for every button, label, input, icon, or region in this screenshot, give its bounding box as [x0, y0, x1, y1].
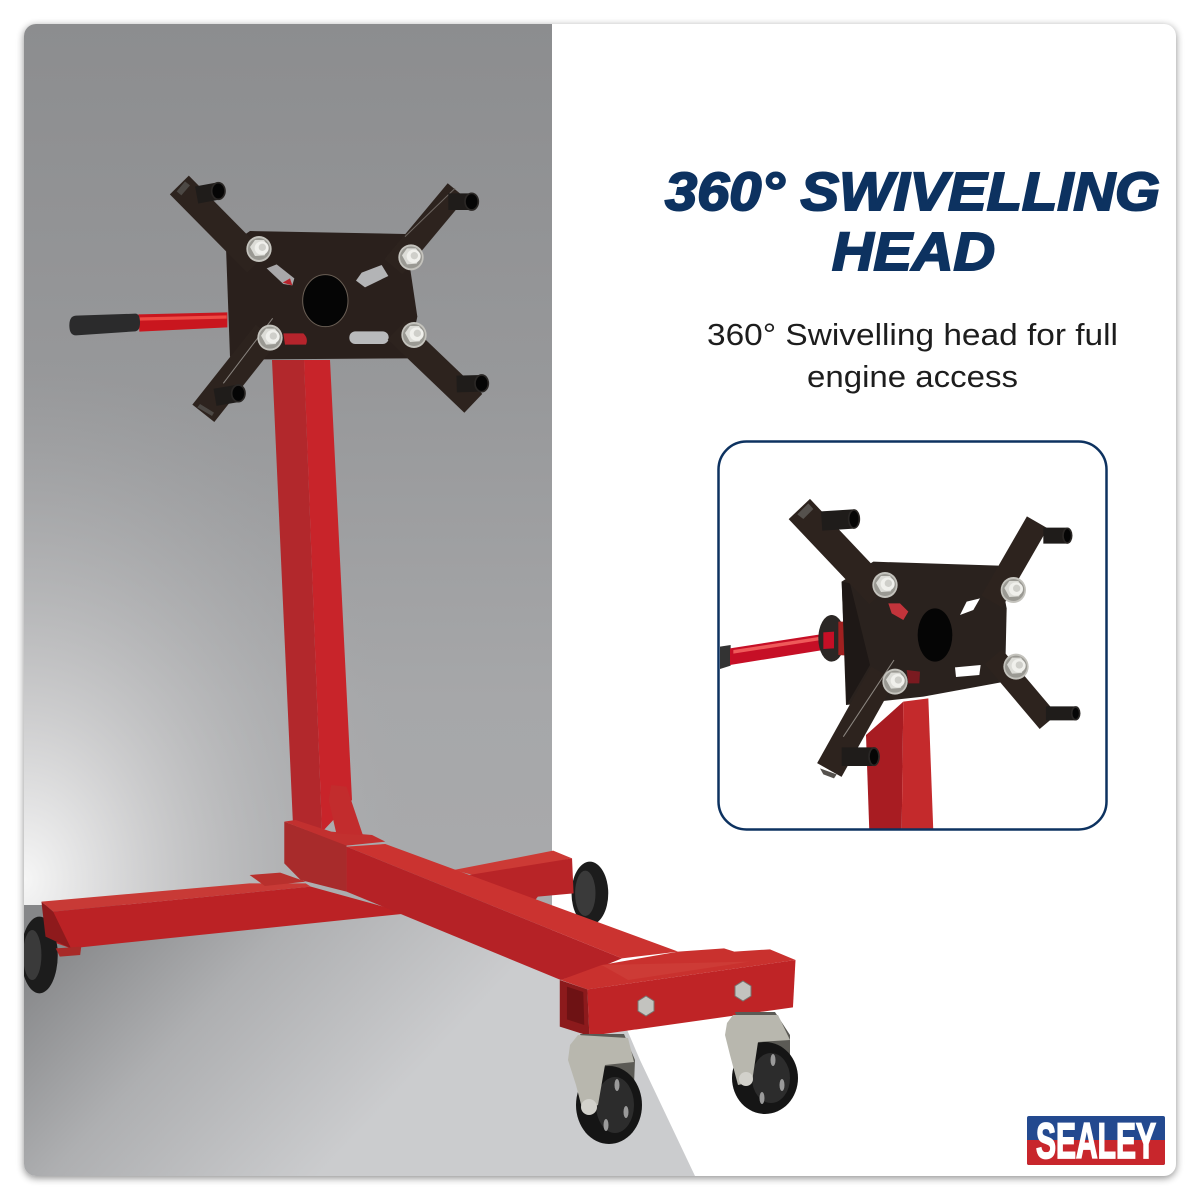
- handle: [69, 312, 227, 335]
- rear left wheel: [21, 917, 58, 993]
- inset bolts: [872, 572, 898, 598]
- stand column: [272, 360, 352, 832]
- rear right wheel: [572, 862, 608, 925]
- arms: [179, 185, 473, 413]
- inset arms: [799, 509, 1048, 770]
- front cross tube: [560, 948, 796, 1036]
- main beam: [347, 844, 678, 980]
- inset pegs: [822, 519, 1075, 757]
- title: 360° SWIVELLING: [665, 162, 1160, 222]
- head plate: [226, 231, 417, 359]
- inset handle: [720, 615, 847, 669]
- rotating head: [69, 181, 488, 416]
- inset plate: [842, 562, 1007, 705]
- product photo: engine stand: [21, 181, 798, 1144]
- inset photo: swivel head close-up: [720, 503, 1080, 832]
- caster: front left: [568, 1034, 642, 1144]
- description text: engine access: [807, 359, 1018, 394]
- centre sleeve: [284, 800, 386, 892]
- panel: detail inset: [718, 442, 1106, 832]
- slots: [267, 264, 294, 285]
- description text: [707, 317, 1118, 394]
- centre hole: [303, 275, 348, 327]
- panel: grey studio backdrop: [24, 24, 695, 1176]
- caster: front right: [725, 1012, 798, 1114]
- tube bolts: [638, 981, 751, 1016]
- cross beam: [41, 851, 574, 957]
- title: [664, 171, 1160, 271]
- base frame: [21, 785, 796, 1036]
- title: HEAD: [832, 222, 995, 282]
- description text: 360° Swivelling head for full: [707, 317, 1118, 352]
- pegs: [197, 191, 482, 397]
- inset column: [866, 698, 933, 832]
- bolts: [246, 236, 272, 262]
- logo: Sealey: [1027, 1116, 1165, 1165]
